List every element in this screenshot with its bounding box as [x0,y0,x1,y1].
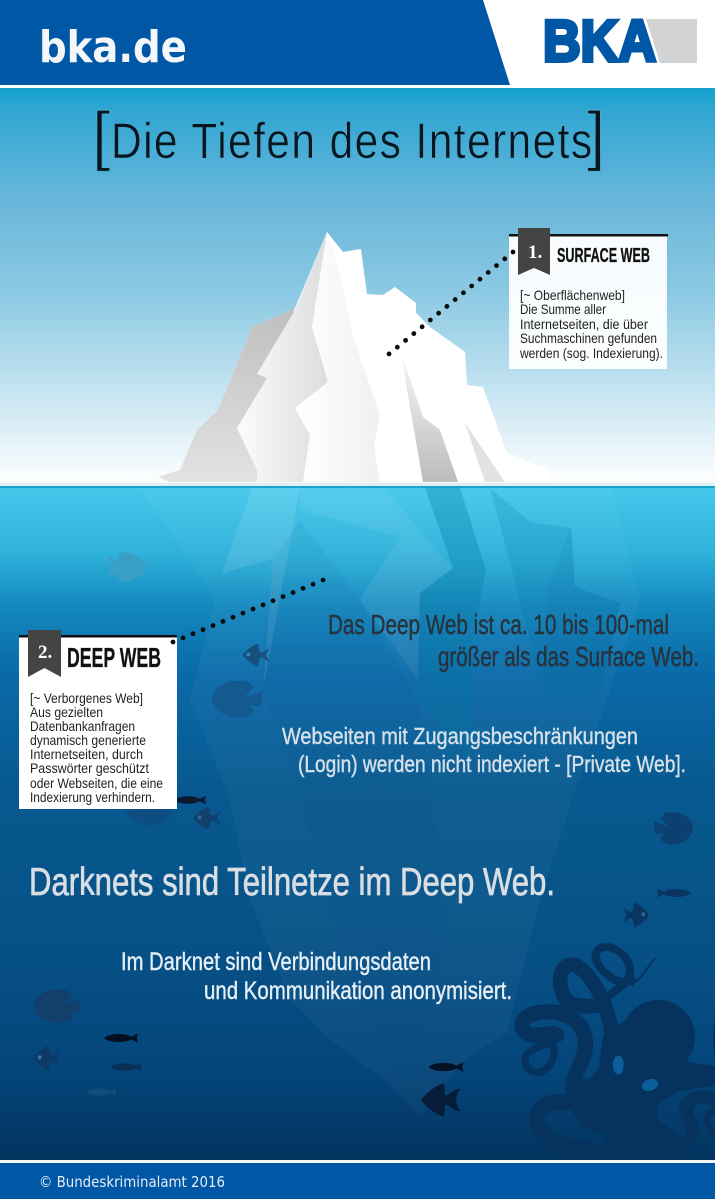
octopus top loop tentacle [596,947,632,998]
fish: black thin lower left [104,1033,138,1043]
ribbon 2: 2. [38,642,52,663]
Surface Web description: Suchmaschinen gefunden [520,330,657,346]
octopus lower left tentacle [537,1102,603,1162]
ribbon 1: 1. [528,242,542,263]
title: [ [92,98,110,172]
Deep Web description: Indexierung verhindern. [30,789,155,805]
octopus right coil [707,1110,715,1135]
title: Die Tiefen des Internets [111,113,592,169]
header site name: bka.de [39,22,187,73]
text: Darknet anonymity [121,948,512,1005]
Surface Web heading: SURFACE WEB [557,245,650,267]
fish: large round right [654,812,693,845]
fish: black angular center [421,1083,461,1117]
octopus lower right tentacle [658,1097,715,1153]
Deep Web description: [~ Verborgenes Web] [30,690,143,706]
iceberg: right shadow [402,356,458,482]
octopus right edge arm [713,1015,715,1062]
fish: angular near dots [242,644,270,666]
Deep Web description: Datenbankanfragen [30,718,135,734]
fish: dark thin lower left [110,1063,142,1071]
fish: angular lower left [34,1045,60,1071]
text: Darknet anonymity: Im Darknet sind Verbindungsdaten [121,948,431,976]
fish: angular right [623,902,649,928]
ribbon 1 [518,228,550,275]
Deep Web description [30,690,163,805]
Surface Web description: Die Summe aller [520,301,606,317]
fish: faint thin lower left [86,1088,116,1096]
underwater iceberg [140,488,640,1115]
dotted leader: Deep Web [173,576,333,642]
octopus eye spots [613,1056,624,1074]
Deep Web heading: DEEP WEB [67,642,161,673]
footer [0,1160,715,1199]
octopus tentacle tip [632,958,655,985]
water background [0,486,715,1161]
text: Darknets: Darknets sind Teilnetze im Deep Web. [29,861,555,904]
iceberg: front face [295,232,380,482]
fish: black behind card [174,796,206,804]
card: Surface Web [509,228,668,369]
text: Private Web: Webseiten mit Zugangsbeschränkungen [282,723,638,749]
copyright: © Bundeskriminalamt 2016 [39,1173,225,1191]
iceberg: middle face [237,232,328,482]
title: ] [587,98,605,172]
octopus left coil [525,1038,557,1072]
octopus body [565,1012,715,1162]
fish: angular beside card [194,807,220,829]
Deep Web description: Aus gezielten [30,704,103,720]
card: Deep Web [19,630,177,809]
iceberg: dark left face [158,308,295,482]
Deep Web description: dynamisch generierte [30,732,146,748]
iceberg above water [158,232,550,482]
octopus left tentacle [522,1012,585,1095]
BKA logo: BKA [543,9,656,74]
Deep Web description: oder Webseiten, die eine [30,775,163,791]
Deep Web description: Internetseiten, durch [30,746,143,762]
sky background [0,88,715,486]
text: Deep Web size [328,609,699,672]
iceberg: white base [158,232,550,482]
fish: black thin center [428,1062,464,1072]
fish: light, upper left [107,552,147,582]
text: Darknet anonymity: und Kommunikation anonymisiert. [204,977,512,1005]
fish: large round [212,681,263,718]
Surface Web description [519,287,663,361]
dotted leader: Surface Web [389,252,513,354]
octopus head [622,1000,695,1073]
text: Private Web [282,723,686,777]
fish: large round lower left [34,989,81,1023]
Deep Web description: Passwörter geschützt [30,760,149,776]
octopus lower coil [565,1145,602,1162]
header bar [0,0,715,88]
ribbon 2 [28,630,61,677]
iceberg: right light shadow [465,423,505,482]
Surface Web description: Internetseiten, die über [520,316,648,332]
waterline [0,483,715,488]
fish: thin right [657,888,691,898]
Surface Web description: werden (sog. Indexierung). [519,345,663,361]
fish: round behind card [125,791,175,825]
Surface Web description: [~ Oberflächenweb] [520,287,625,303]
octopus [522,947,715,1162]
octopus upper left tentacle [560,965,612,1035]
